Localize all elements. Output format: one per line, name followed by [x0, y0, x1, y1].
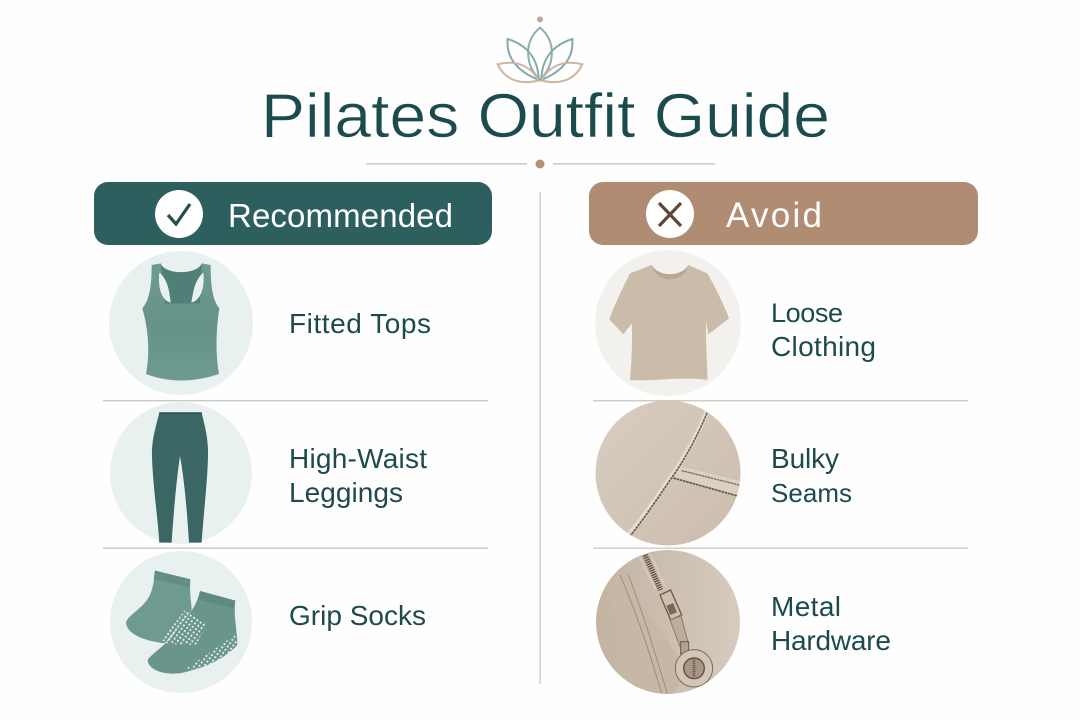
avoid header [589, 182, 978, 245]
row divider [593, 548, 968, 549]
item: loose clothing: Clothing [771, 331, 876, 362]
item: metal hardware: Metal [771, 591, 841, 622]
row divider [103, 548, 488, 549]
avoid header: Avoid [726, 196, 822, 235]
title: Pilates Outfit Guide [261, 81, 830, 151]
item: loose clothing: Loose [771, 298, 843, 328]
item: bulky seams: Bulky [771, 443, 839, 474]
item: high-waist leggings: High-Waist [289, 443, 427, 474]
item: metal hardware: Hardware [771, 625, 891, 656]
item: bulky seams [596, 400, 852, 546]
title divider [366, 160, 715, 168]
panel: recommended [94, 182, 492, 693]
icon: lotus logo [498, 16, 582, 82]
row divider [593, 400, 968, 401]
item: loose clothing [595, 250, 876, 396]
item: grip socks: Grip Socks [289, 600, 426, 631]
item: grip socks [110, 551, 426, 693]
item: fitted tops [109, 251, 431, 395]
centre divider [540, 192, 541, 684]
item: high-waist leggings: Leggings [289, 477, 403, 508]
item: high-waist leggings [110, 402, 427, 544]
item: fitted tops: Fitted Tops [289, 308, 431, 339]
item: metal hardware [596, 550, 891, 697]
panel: avoid [589, 182, 978, 697]
row divider [103, 400, 488, 401]
recommended header: Recommended [228, 197, 453, 234]
recommended header [94, 182, 492, 245]
item: bulky seams: Seams [771, 478, 852, 508]
